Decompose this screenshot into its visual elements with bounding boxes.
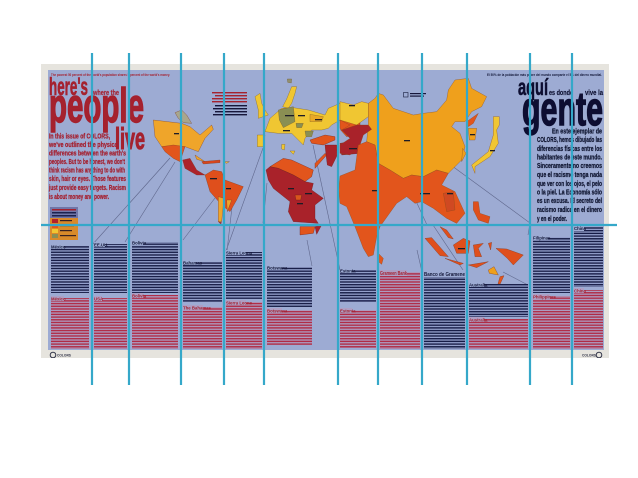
map: country labels xyxy=(174,105,495,249)
english headline: live xyxy=(115,121,145,156)
english intro text: differences between the earth's xyxy=(49,148,126,158)
column: Bahamas xyxy=(183,260,222,349)
map scale key xyxy=(404,92,426,97)
column: Botswana xyxy=(267,265,312,345)
center map note xyxy=(212,92,247,115)
footer logo left: COLORS xyxy=(57,352,71,358)
spanish intro text: racismo radica en el dinero xyxy=(537,205,602,214)
map: Asia xyxy=(339,78,499,264)
column: Australia: Australia xyxy=(469,318,488,322)
column: U.S.A. xyxy=(94,242,127,349)
spanish intro text: es un excusa. El secreto del xyxy=(537,196,602,205)
top caption right: El 50% de la población más pobre del mundo comparte el 5% del dinero mundial. xyxy=(487,73,602,77)
english intro text: skin, hair or eyes. Those features xyxy=(49,174,126,183)
column: Bolivia: Bolivia xyxy=(132,240,147,246)
spanish headline: aquí xyxy=(518,74,549,100)
column: Sierra Leona: Sierra Leona xyxy=(226,250,253,256)
poster xyxy=(41,64,609,358)
column: Estonia xyxy=(340,268,376,348)
english intro text: we've outlined the physical xyxy=(48,140,119,149)
blue cutting guides xyxy=(41,53,617,385)
column: China: China xyxy=(574,226,587,231)
english intro text: In this issue of COLORS, xyxy=(49,132,110,140)
column: Filipinas xyxy=(533,235,570,349)
column: México: México xyxy=(51,296,66,302)
column: Sierra Leona: Sierra Leone xyxy=(226,300,253,306)
column: Bolivia xyxy=(132,240,178,349)
column: Filipinas: Philippines xyxy=(533,294,557,300)
spanish headline: es donde xyxy=(549,88,573,97)
legend xyxy=(50,207,78,240)
leader lines xyxy=(92,145,530,285)
english headline: people xyxy=(49,80,144,133)
blue map panel xyxy=(48,70,604,350)
column: Estonia: Estonia xyxy=(340,268,356,274)
column: Botswana: Botswana xyxy=(267,308,288,314)
column: U.S.A.: EE.UU. xyxy=(94,242,108,248)
footer logo left xyxy=(50,352,71,358)
spanish headline xyxy=(518,74,604,135)
map: Europe xyxy=(255,79,360,154)
column: China xyxy=(574,226,603,349)
column: Sierra Leona xyxy=(226,250,262,349)
column: Grameen Bank: Grameen Bank xyxy=(380,271,407,277)
column: Estonia: Estonia xyxy=(340,308,356,314)
spanish headline: vive la xyxy=(585,88,604,97)
map xyxy=(153,78,523,284)
map: Americas xyxy=(153,110,243,224)
english headline: where the xyxy=(92,88,119,97)
spanish intro text: que ver con los ojos, el pelo xyxy=(537,179,602,188)
paper sheet xyxy=(41,64,609,358)
english intro text: just provide easy targets. Racism xyxy=(48,183,126,192)
spanish intro text: En este ejemplar de xyxy=(552,126,602,136)
top caption left: The poorest 50 percent of the world's population shares 5 percent of the world's money. xyxy=(51,73,170,77)
spanish intro text xyxy=(537,126,603,223)
column: China: China xyxy=(574,288,587,294)
column: Filipinas: Filipinas xyxy=(533,236,551,240)
english intro text: peoples. But to be honest, we don't xyxy=(49,157,125,166)
map: Southeast Asia and Oceania xyxy=(425,227,523,284)
spanish intro text: diferencias físicas entre los xyxy=(537,144,602,153)
column: México xyxy=(51,244,89,349)
english headline xyxy=(49,73,145,156)
column: Bolivia: Bolivia xyxy=(132,294,147,298)
english headline: here's xyxy=(49,73,88,101)
column: Grameen Bank xyxy=(380,270,420,349)
map: Africa and Middle East xyxy=(266,120,360,235)
column: Bahamas: The Bahamas xyxy=(183,306,212,310)
column: Australia: Australia xyxy=(469,282,488,288)
spanish intro text: Sinceramente no creemos xyxy=(537,161,602,170)
column: Bahamas: Bahamas xyxy=(183,260,203,266)
footer logo right: COLORS xyxy=(582,352,596,358)
column: Banco de Gramene xyxy=(424,270,465,349)
english intro text xyxy=(48,132,126,201)
spanish intro text: que el racismo tenga nada xyxy=(537,170,603,179)
column: Botswana: Botswana xyxy=(267,266,288,270)
spanish intro text: habitantes de este mundo. xyxy=(537,152,602,162)
column: México: México xyxy=(51,244,66,250)
column: Australia xyxy=(469,282,528,349)
spanish intro text: y en el poder. xyxy=(537,214,567,223)
spanish intro text: o la piel. La Economía sólo xyxy=(537,188,602,196)
column: U.S.A.: USA xyxy=(94,296,103,302)
column: Banco de Gramene: Banco de Gramene xyxy=(424,272,465,278)
english intro text: think racism has anything to do with xyxy=(49,166,125,174)
english intro text: is about money and power. xyxy=(49,192,109,201)
